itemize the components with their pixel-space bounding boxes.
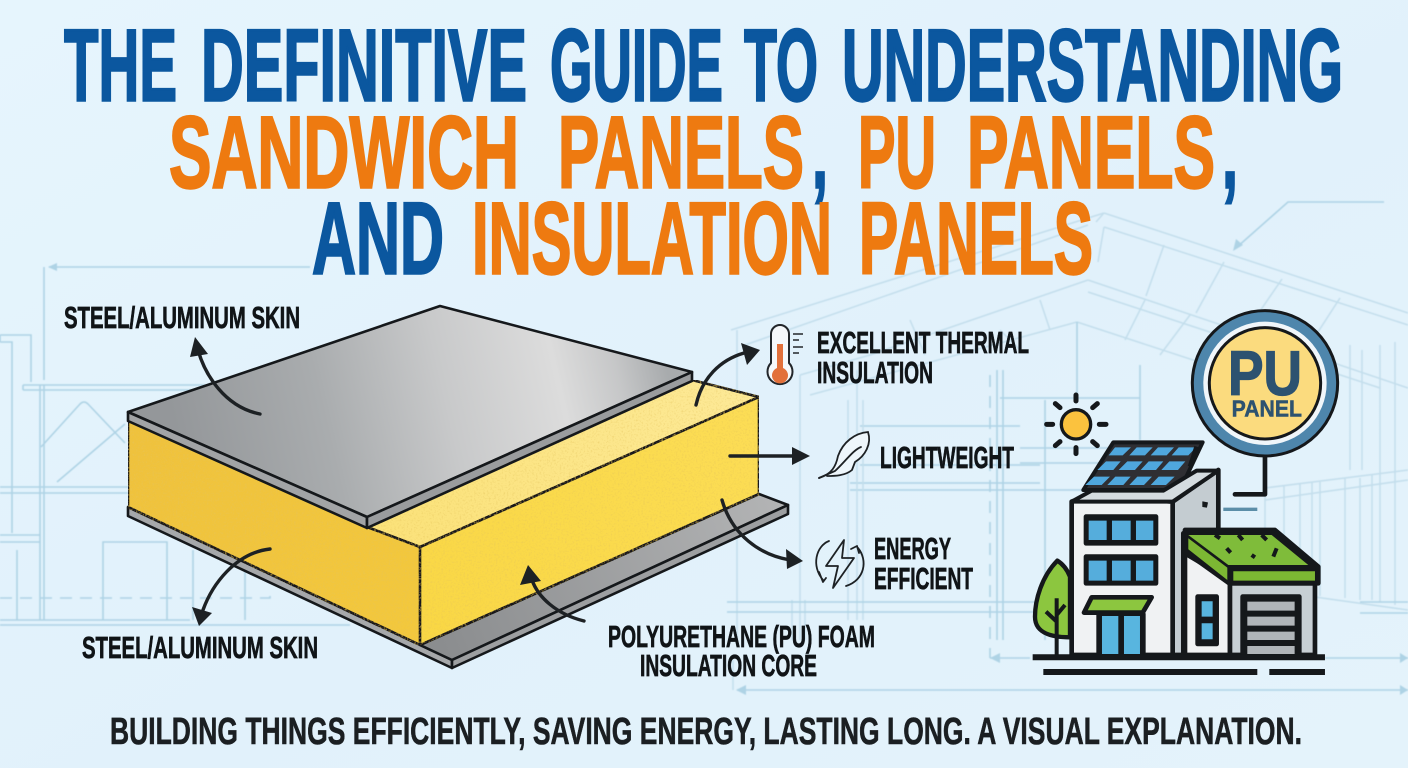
badge circle [1192,311,1338,456]
side house [1185,530,1318,655]
title [64,8,1343,296]
label: polyurethane foam core [608,619,875,683]
title line 3: INSULATION [472,182,832,296]
title line 2: PANELS [558,96,804,210]
label: top skin: STEEL/ALUMINUM SKIN [64,300,300,335]
title line 1 [64,8,1343,122]
label: bottom skin: STEEL/ALUMINUM SKIN [82,630,318,665]
PU panel badge [1192,311,1338,509]
arrow: foam core [520,565,584,621]
label: polyurethane foam core: INSULATION CORE [640,648,817,683]
label: excellent thermal insulation: EXCELLENT THERMAL [817,325,1029,360]
icon: feather [819,432,869,478]
title line 3: AND [312,182,444,296]
blueprint drawing: right structure [727,202,1408,695]
icon: energy cycle [816,540,864,588]
label: energy efficient [874,531,973,596]
title line 1: TO [744,8,818,122]
title line 2: , [812,96,828,210]
label: excellent thermal insulation [817,325,1029,390]
title line 2: PU [858,96,936,210]
icon: sun [1047,395,1106,454]
icon: thermometer [768,325,803,384]
title line 1: GUIDE [550,8,723,122]
badge text: PANEL: PANEL [1232,396,1302,422]
main building [1072,470,1218,655]
label: excellent thermal insulation: INSULATION [817,355,933,390]
tree [1035,561,1070,655]
title line 2: PANELS [967,96,1215,210]
arrow: lightweight [730,447,810,465]
title line 2: , [1222,96,1238,210]
foam core [128,380,759,645]
bottom skin [128,494,788,668]
blueprint drawing: left structure [0,263,350,625]
top skin [128,306,692,528]
title line 2 [169,96,1238,210]
building illustration [1033,395,1325,672]
badge text: PU: PU [1228,339,1302,409]
arrow: bottom skin [192,549,270,626]
sandwich panel diagram [128,306,788,668]
solar panels [1083,442,1203,500]
label: energy efficient: EFFICIENT [874,561,973,596]
title line 1: THE [64,8,177,122]
title line 3: PANELS [859,182,1093,296]
label: lightweight: LIGHTWEIGHT [880,440,1014,475]
arrow: energy [722,500,803,569]
ground lines [1033,657,1325,672]
arrow: thermal [696,343,760,405]
label: polyurethane foam core: POLYURETHANE (PU) FOAM [608,619,875,654]
arrow: top skin [190,337,260,414]
title line 1: DEFINITIVE [201,8,527,122]
label: energy efficient: ENERGY [874,531,951,566]
title line 2: SANDWICH [169,96,519,210]
